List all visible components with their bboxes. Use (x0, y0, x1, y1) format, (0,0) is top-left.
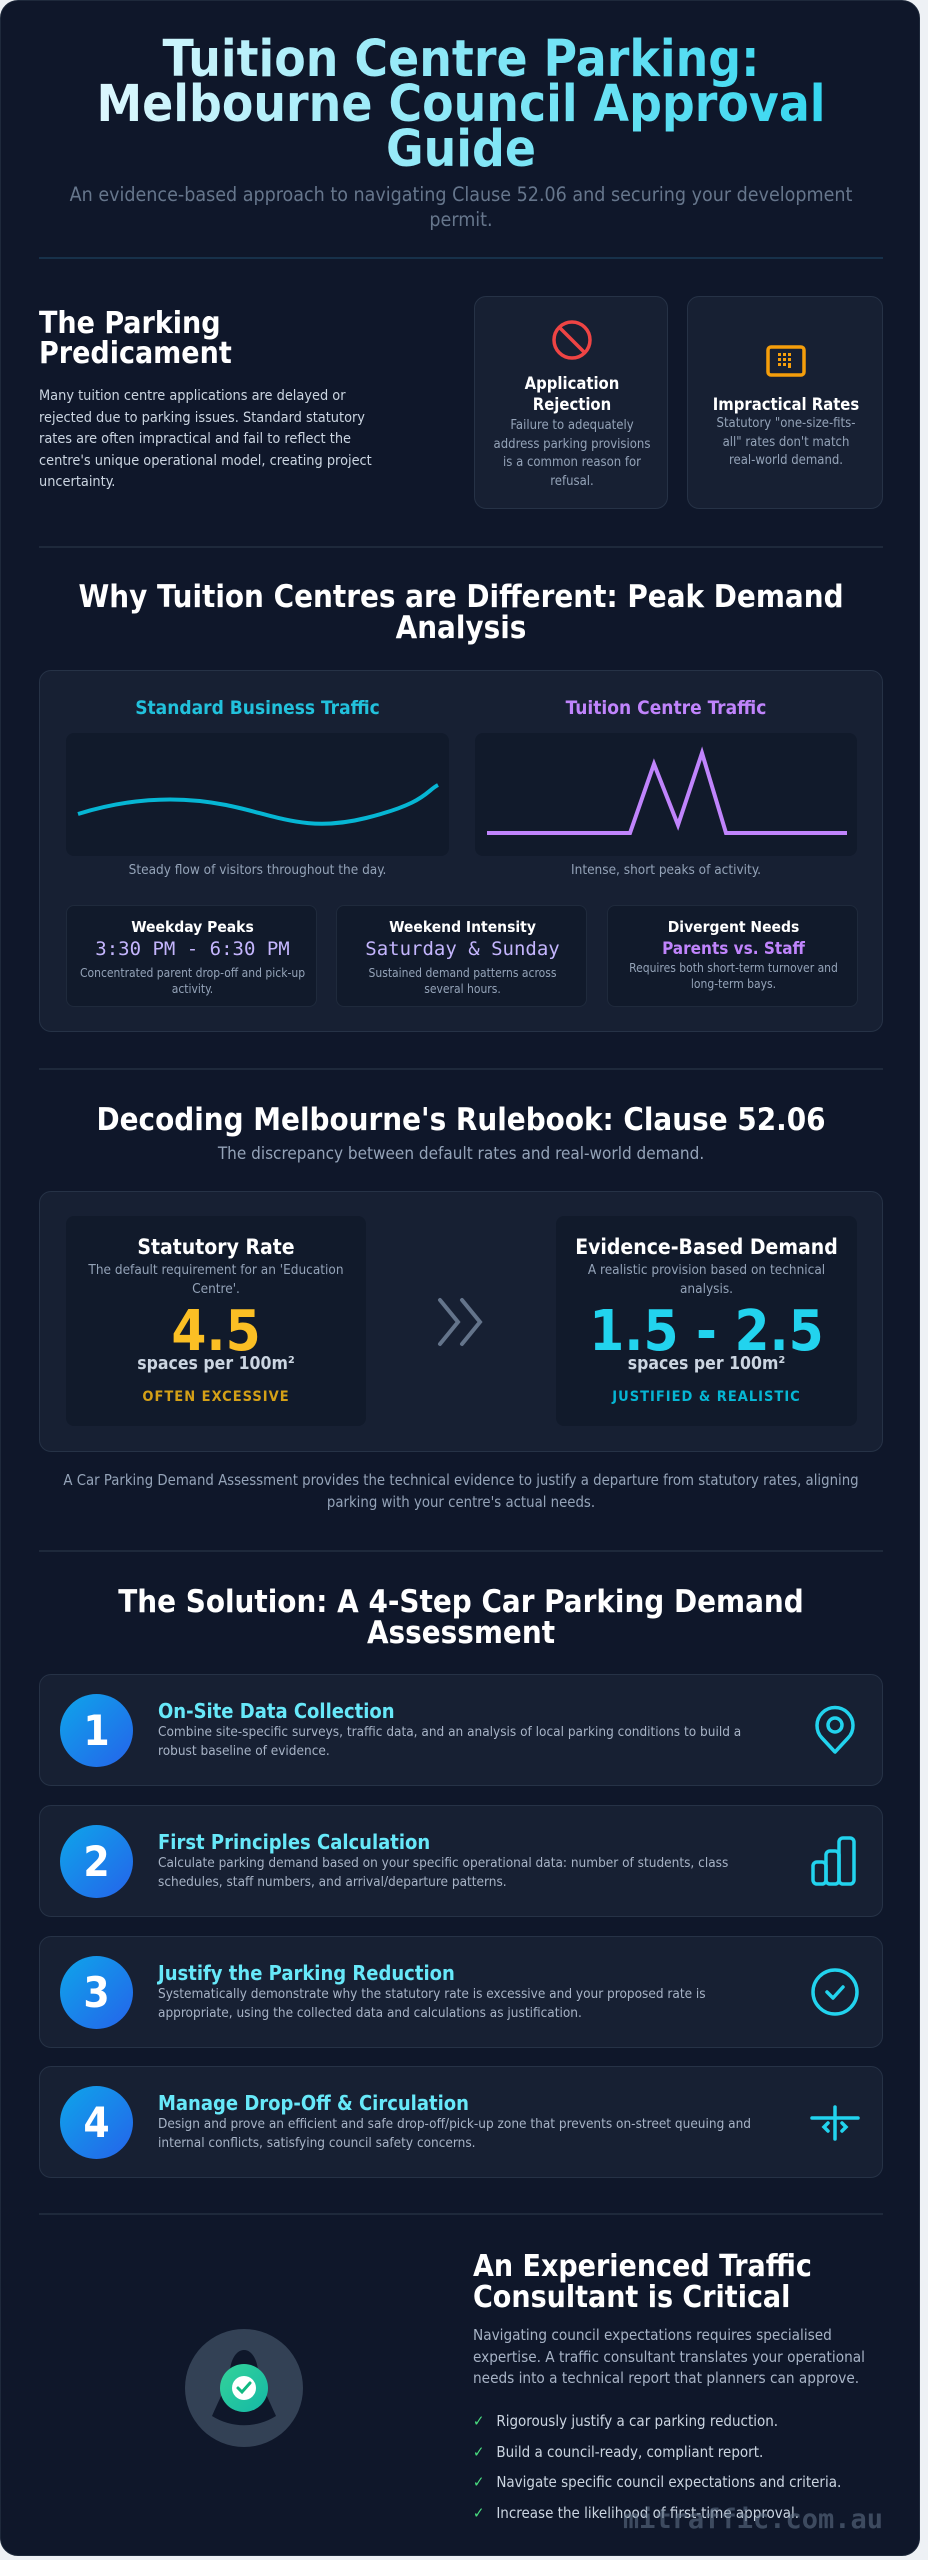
subtitle: discrepancy: The discrepancy between default rates and real-world demand. (218, 1144, 704, 1164)
watermark: mitraffic.com.au (623, 2504, 883, 2535)
checklist (473, 2412, 841, 2522)
statutory rate box: spaces per 100m² (137, 1354, 295, 1374)
step 3: 3 (83, 1968, 110, 2017)
panel: rates comparison (39, 1191, 883, 1452)
caption: peaks: Intense, short peaks of activity. (571, 862, 761, 878)
step 3 (39, 1936, 883, 2048)
card: impractical rates: Impractical Rates (713, 395, 859, 414)
evidence-based box (556, 1216, 857, 1426)
heading: decoding rulebook: Decoding Melbourne's Rulebook: Clause 52.06 (96, 1102, 826, 1138)
checklist: ✓ Rigorously justify a car parking reduction. (473, 2412, 778, 2430)
evidence-based box: A realistic provision based on technical analysis. (588, 1262, 825, 1296)
statutory rate box: Statutory Rate (137, 1235, 295, 1259)
text: assessment note: A Car Parking Demand Assessment provides the technical evidence to justify a departure from statutory rates, aligning parking with your centre's actual needs. (63, 1472, 859, 1510)
title: Guide (386, 120, 536, 179)
card: impractical rates (687, 296, 883, 509)
heading: experienced consultant: An Experienced Traffic (473, 2249, 812, 2284)
icon: prohibited (552, 320, 592, 360)
heading: the solution: The Solution: A 4-Step Car Parking Demand (118, 1584, 804, 1620)
step 4: Design and prove an efficient and safe drop-off/pick-up zone that prevents on-street queuing and internal conflicts, satisfying council safety concerns. (158, 2116, 751, 2151)
chart: steady line (66, 733, 449, 856)
step 2: First Principles Calculation (158, 1830, 430, 1854)
icon: circulation (810, 2105, 860, 2141)
subtitle: An evidence-based approach to navigating Clause 52.06 and securing your development permit. (70, 183, 852, 231)
step 1: 1 (83, 1706, 110, 1755)
chart title: standard business: Standard Business Traffic (135, 697, 380, 719)
evidence-based box: JUSTIFIED & REALISTIC (612, 1389, 801, 1405)
title: Tuition Centre Parking: (163, 30, 759, 89)
card: impractical rates: Statutory "one-size-fits-all" rates don't match real-world demand. (717, 416, 855, 468)
step 1 (39, 1674, 883, 1786)
checklist: ✓ Build a council-ready, compliant report. (473, 2442, 763, 2460)
heading: the solution (118, 1584, 804, 1651)
heading: the solution: Assessment (367, 1615, 555, 1651)
heading: The Parking Predicament: Predicament (39, 336, 232, 371)
stat: weekday peaks: 3:30 PM - 6:30 PM (95, 938, 290, 960)
card: application rejection: Rejection (533, 395, 611, 414)
heading: experienced consultant: Consultant is Critical (473, 2280, 790, 2315)
stat: weekend intensity (336, 905, 587, 1007)
icon: location pin (815, 1706, 855, 1754)
card: application rejection: Application (525, 374, 619, 393)
text: predicament description: Many tuition centre applications are delayed or rejected due to parking issues. Standard statutory rates are often impractical and fail to reflect the centre's unique operational model, creating project uncertainty. (39, 388, 372, 490)
section: parking predicament (39, 306, 372, 490)
stat: divergent needs: Requires both short-term turnover and long-term bays. (629, 961, 838, 991)
step 3: Justify the Parking Reduction (158, 1961, 455, 1985)
stat: weekend intensity: Sustained demand patterns across several hours. (368, 966, 556, 996)
stat: weekday peaks: Concentrated parent drop-off and pick-up activity. (80, 966, 305, 996)
evidence-based box: spaces per 100m² (628, 1354, 785, 1374)
evidence-based box: 1.5 - 2.5 (589, 1299, 824, 1364)
illustration: consultant badge (185, 2329, 303, 2447)
step 1: Combine site-specific surveys, traffic data, and an analysis of local parking conditions to build a robust baseline of evidence. (158, 1724, 741, 1759)
stat: divergent needs (607, 905, 858, 1007)
step 1: On-Site Data Collection (158, 1699, 395, 1723)
heading: experienced consultant (473, 2249, 812, 2315)
heading: why tuition centres are different: Analysis (396, 610, 526, 646)
title (11, 37, 911, 172)
stat: weekend intensity: Saturday & Sunday (365, 938, 560, 960)
stat: divergent needs: Divergent Needs (668, 918, 799, 936)
stat: weekday peaks (66, 905, 317, 1007)
step 4: 4 (83, 2098, 110, 2147)
statutory rate box: 4.5 (171, 1299, 261, 1364)
heading: The Parking Predicament (39, 306, 232, 371)
section: consultant (473, 2249, 865, 2522)
icon: check circle (811, 1968, 859, 2016)
step 3: Systematically demonstrate why the statutory rate is excessive and your proposed rate is appropriate, using the collected data and calculations as justification. (158, 1986, 706, 2021)
stat: weekday peaks: Weekday Peaks (131, 918, 254, 936)
icon: bar chart (811, 1836, 856, 1886)
heading: why tuition centres are different: Why Tuition Centres are Different: Peak Demand (78, 579, 844, 615)
step 4: Manage Drop-Off & Circulation (158, 2091, 469, 2115)
title: Melbourne Council Approval (96, 75, 826, 134)
step 2: Calculate parking demand based on your specific operational data: number of students, class schedules, staff numbers, and arrival/departure patterns. (158, 1855, 728, 1890)
stat: weekend intensity: Weekend Intensity (389, 918, 536, 936)
statutory rate box (66, 1216, 366, 1426)
step 2: 2 (83, 1837, 110, 1886)
heading: The Parking Predicament: The Parking (39, 306, 221, 341)
text: consultant description: Navigating council expectations requires specialised expertise. A traffic consultant translates your operational needs into a technical report that planners can approve. (473, 2326, 865, 2387)
arrow: chevrons (438, 1298, 482, 1346)
card: application rejection (474, 296, 668, 509)
statutory rate box: OFTEN EXCESSIVE (142, 1389, 290, 1405)
card: application rejection: Failure to adequately address parking provisions is a common reason for refusal. (494, 418, 650, 488)
chart title: tuition centre: Tuition Centre Traffic (566, 697, 766, 719)
icon: calculator (766, 345, 806, 377)
step 2 (39, 1805, 883, 1917)
heading: why tuition centres are different (78, 579, 844, 646)
checklist: ✓ Navigate specific council expectations and criteria. (473, 2473, 841, 2491)
stat: divergent needs: Parents vs. Staff (662, 939, 805, 959)
checklist: ✓ Increase the likelihood of first-time approval. (473, 2504, 799, 2522)
panel: peak demand analysis (39, 670, 883, 1032)
statutory rate box: The default requirement for an 'Education Centre'. (88, 1262, 344, 1296)
evidence-based box: Evidence-Based Demand (575, 1235, 838, 1259)
step 4 (39, 2066, 883, 2178)
caption: steady: Steady flow of visitors throughout the day. (129, 862, 386, 878)
chart: peak line (475, 733, 857, 856)
